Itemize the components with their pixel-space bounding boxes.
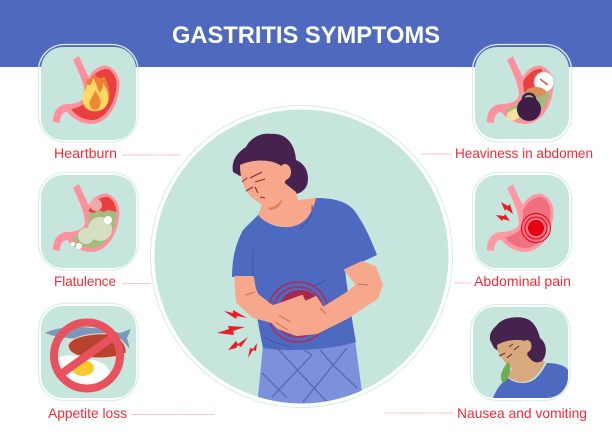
stomach <box>487 56 554 124</box>
card: abdominal pain <box>472 172 572 270</box>
leader: heartburn <box>123 154 181 156</box>
hair back and bun <box>233 134 308 194</box>
shirt folds <box>253 205 325 346</box>
stomach <box>53 184 120 252</box>
stomach outline <box>53 56 120 124</box>
fish <box>45 327 131 349</box>
ear <box>279 164 291 180</box>
prohibition sign <box>54 322 120 388</box>
woman figure <box>217 134 382 404</box>
kettlebell <box>517 94 541 121</box>
arm creases <box>246 284 368 330</box>
leader: nausea <box>385 412 454 414</box>
label: appetite loss: Appetite loss <box>48 405 127 421</box>
leader: appetite loss <box>132 414 215 416</box>
pain target <box>522 214 550 242</box>
meat <box>68 334 126 358</box>
stomach inner <box>71 69 117 120</box>
neck <box>258 180 316 227</box>
label: heartburn: Heartburn <box>54 145 117 161</box>
card: appetite loss <box>38 304 138 400</box>
card: flatulence <box>38 172 138 270</box>
leader: flatulence <box>123 282 151 284</box>
leader: heaviness <box>422 153 451 155</box>
central circle <box>150 106 452 408</box>
card: heartburn <box>38 44 138 142</box>
label: heaviness: Heaviness in abdomen <box>455 145 593 161</box>
arms and hands <box>235 262 382 335</box>
plate of food <box>534 72 554 92</box>
skirt <box>258 340 362 404</box>
neck shadow <box>268 198 282 210</box>
label: flatulence: Flatulence <box>54 273 116 289</box>
card: nausea <box>470 304 570 400</box>
label: abdominal pain: Abdominal pain <box>474 273 571 289</box>
card: heaviness <box>472 44 572 142</box>
label: nausea: Nausea and vomiting <box>457 405 587 421</box>
header banner <box>0 0 612 67</box>
shirt <box>232 198 377 350</box>
stomach <box>487 184 554 252</box>
leader: abdominal pain <box>455 282 471 284</box>
pain bolts <box>217 310 257 358</box>
woman vomiting <box>490 317 568 398</box>
orange food <box>526 87 546 97</box>
bolts <box>496 202 513 221</box>
egg <box>57 355 110 385</box>
gas bubbles <box>71 199 112 249</box>
title: GASTRITIS SYMPTOMS <box>172 22 440 49</box>
abdomen pain rings <box>268 282 328 342</box>
face <box>240 160 286 208</box>
cheese <box>507 108 519 121</box>
face details <box>242 172 265 198</box>
flame <box>83 74 110 112</box>
